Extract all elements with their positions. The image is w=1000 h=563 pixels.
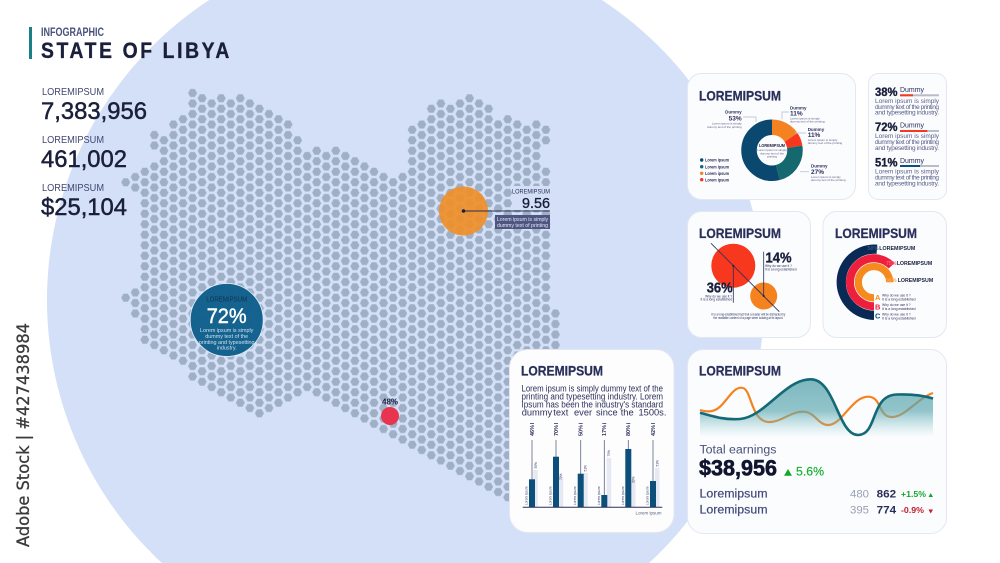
row 38%: 38% bbox=[875, 85, 898, 99]
label: 14%: 14% bbox=[766, 249, 792, 266]
A B C legend: It is a long established bbox=[882, 297, 916, 301]
label: 11% middle bbox=[795, 127, 843, 145]
row 1: +1.5% bbox=[901, 490, 926, 499]
row 51%: dummy text of the printing bbox=[875, 174, 939, 182]
footnote: the readable content of a page when looking at its layout. bbox=[713, 316, 783, 320]
title block: STATE OF LIBYA bbox=[41, 38, 232, 63]
bar chart: Lorem ipsum bbox=[621, 486, 625, 505]
legend: Lorem ipsum bbox=[705, 177, 729, 183]
vertical stock credit: Adobe Stock | #427438984 bbox=[14, 323, 34, 547]
label: 27% bbox=[800, 163, 846, 182]
footnote: It is a long established fact that a reader will be distracted by bbox=[711, 313, 786, 317]
row 1: 480 bbox=[850, 488, 869, 500]
row 38%: Dummy bbox=[900, 85, 924, 94]
donut centre text: Lorem ipsum is simply bbox=[757, 148, 787, 152]
row 38%: dummy text of the printing bbox=[875, 104, 939, 111]
paragraph: ever bbox=[574, 408, 592, 418]
paragraph: text bbox=[553, 408, 569, 418]
label: 53%: Dummy bbox=[725, 110, 742, 115]
A B C legend: Why do we use it ? bbox=[882, 303, 911, 307]
A B C legend: Why do we use it ? bbox=[882, 312, 911, 316]
label: 11% top: Dummy bbox=[790, 105, 807, 110]
paragraph bbox=[522, 383, 666, 418]
marker: blue 72%: LOREMIPSUM bbox=[206, 296, 247, 304]
bar chart bbox=[523, 424, 662, 507]
title block: INFOGRAPHIC bbox=[41, 27, 104, 39]
marker: orange 9.56: dummy text of printing bbox=[497, 223, 548, 229]
row 72%: Dummy bbox=[900, 120, 924, 130]
key statistics: 461,002 bbox=[41, 146, 127, 173]
marker: orange 9.56: Lorem ipsum is simply bbox=[497, 217, 549, 223]
bar chart: 17% bbox=[602, 424, 608, 436]
panel: donut chart bbox=[688, 74, 856, 200]
legend: Lorem ipsum bbox=[705, 158, 729, 164]
panel: circles comparison bbox=[688, 212, 810, 338]
donut centre text: printing bbox=[767, 155, 777, 159]
label: 36%: 36% bbox=[707, 280, 733, 297]
label: 11% top: dummy text of the printing bbox=[790, 119, 825, 123]
label: 36% bbox=[700, 280, 733, 302]
bar chart: 70% bbox=[554, 424, 560, 436]
total earnings: 5.6% bbox=[796, 466, 824, 478]
row 2: -0.9% bbox=[901, 506, 924, 515]
panel: bar chart with text bbox=[510, 350, 674, 532]
paragraph: since bbox=[596, 408, 618, 418]
legend bbox=[700, 158, 729, 183]
arc labels: LOREMIPSUM bbox=[897, 261, 933, 267]
arc labels: LOREMIPSUM bbox=[898, 278, 934, 284]
row 38% bbox=[875, 85, 940, 117]
bar chart: 46% bbox=[530, 424, 536, 436]
key statistics: LOREMIPSUM bbox=[42, 135, 104, 146]
row 51%: 51% bbox=[875, 156, 898, 170]
line chart bbox=[700, 379, 933, 437]
row 38%: and typesetting industry. bbox=[875, 110, 939, 117]
marker: blue 72%: Lorem ipsum is simply bbox=[200, 328, 254, 334]
label: 27%: dummy text of the printing bbox=[811, 178, 846, 182]
background circle bbox=[47, 0, 764, 563]
marker: blue 72%: dummy text of the bbox=[205, 334, 248, 340]
bar chart: 70% bbox=[559, 473, 563, 480]
panel: circles comparison: LOREMIPSUM bbox=[699, 226, 781, 241]
row 51% bbox=[875, 156, 940, 188]
bar chart: Lorem ipsum bbox=[597, 486, 601, 505]
paragraph: 1500s. bbox=[638, 408, 666, 418]
label: 11% top: 11% bbox=[790, 110, 803, 118]
red and orange circles bbox=[711, 243, 779, 312]
marker: orange 9.56: 9.56 bbox=[522, 196, 550, 212]
label: 11% middle: Dummy bbox=[808, 127, 825, 132]
label: 11% middle: dummy text of the printing bbox=[808, 141, 843, 145]
bar chart: 51% bbox=[584, 465, 588, 472]
panel: radial bars bbox=[823, 212, 946, 338]
paragraph: the bbox=[621, 408, 634, 418]
panel: earnings bbox=[688, 350, 946, 534]
hexagon map of Libya bbox=[121, 88, 560, 502]
key statistics: 7,383,956 bbox=[41, 98, 147, 125]
row 51%: and typesetting industry. bbox=[875, 180, 939, 188]
A B C legend: C bbox=[875, 312, 881, 321]
arc labels: 75% bbox=[886, 261, 897, 267]
label: 14%: It is a long established bbox=[765, 268, 797, 272]
A B C legend: Why do we use it ? bbox=[882, 294, 911, 298]
bar chart: Lorem ipsum bbox=[524, 486, 528, 505]
paragraph: dummy bbox=[522, 408, 553, 418]
bar chart: 80% bbox=[626, 424, 632, 436]
marker: blue 72%: 72% bbox=[207, 305, 247, 328]
row 51%: Dummy bbox=[900, 156, 924, 165]
bar chart: Lorem ipsum bbox=[548, 486, 552, 505]
paragraph: Ipsum has been the industry's standard bbox=[522, 400, 663, 410]
bar chart: 50% bbox=[578, 424, 584, 436]
donut centre text: dummy text of the bbox=[760, 151, 784, 155]
row 51%: Lorem ipsum is simply bbox=[875, 169, 940, 176]
A B C legend bbox=[875, 293, 916, 321]
row 1: Loremipsum bbox=[700, 488, 768, 500]
panel: bar chart with text: LOREMIPSUM bbox=[521, 364, 603, 379]
label: 53%: 53% bbox=[729, 115, 742, 122]
legend: Lorem ipsum bbox=[705, 171, 729, 177]
A B C legend: It is a long established bbox=[882, 307, 916, 311]
row 38%: Lorem ipsum is simply bbox=[875, 98, 940, 105]
row 2 bbox=[700, 504, 933, 516]
label: 27%: Dummy bbox=[811, 163, 828, 168]
bar chart: 75% bbox=[607, 450, 611, 456]
key statistics: $25,104 bbox=[41, 194, 127, 221]
arc labels bbox=[868, 246, 934, 284]
paragraph: Lorem ipsum is simply dummy text of the bbox=[522, 383, 663, 393]
arc labels: 50% bbox=[868, 246, 879, 252]
paragraph: printing and typesetting industry. Lorem bbox=[522, 392, 663, 402]
row 72% bbox=[875, 120, 940, 152]
row 1: 862 bbox=[877, 488, 896, 500]
row 72%: 72% bbox=[875, 120, 898, 134]
marker: orange 9.56 bbox=[439, 186, 553, 236]
legend: Lorem ipsum bbox=[705, 164, 729, 170]
total earnings: Total earnings bbox=[700, 444, 777, 456]
bar chart: 35% bbox=[534, 462, 538, 468]
row 2: 395 bbox=[850, 504, 869, 516]
title block bbox=[29, 27, 232, 63]
axis caption: Lorem ipsum bbox=[635, 510, 662, 515]
A B C legend: A bbox=[875, 293, 881, 302]
donut centre text bbox=[757, 143, 787, 159]
key statistics bbox=[41, 87, 147, 221]
label: 53%: dummy text of the printing bbox=[707, 125, 742, 129]
row 72%: dummy text of the printing bbox=[875, 139, 939, 146]
row 2: Loremipsum bbox=[700, 504, 768, 516]
label: 36%: It is a long established bbox=[700, 298, 732, 302]
footnote bbox=[711, 313, 786, 320]
total earnings bbox=[699, 444, 824, 481]
label: 27%: 27% bbox=[811, 169, 824, 176]
row 1 bbox=[700, 488, 933, 500]
panel: donut chart: LOREMIPSUM bbox=[699, 89, 781, 104]
panel: percentage bars bbox=[868, 74, 946, 200]
row 72%: and typesetting industry. bbox=[875, 145, 939, 152]
row 72%: Lorem ipsum is simply bbox=[875, 133, 940, 140]
A B C legend: B bbox=[875, 302, 881, 311]
label: 11% middle: 11% bbox=[808, 132, 821, 139]
panel: radial bars: LOREMIPSUM bbox=[835, 226, 917, 241]
marker: red 48%: 48% bbox=[382, 396, 398, 406]
bar chart: Lorem ipsum bbox=[573, 486, 577, 505]
label: 14%: Why do we use it ? bbox=[765, 264, 792, 268]
label: 53%: Lorem ipsum is simply bbox=[712, 122, 742, 126]
key statistics: LOREMIPSUM bbox=[42, 183, 104, 194]
bar chart: 42% bbox=[651, 424, 657, 436]
A B C legend: It is a long established bbox=[882, 316, 916, 320]
donut chart bbox=[749, 127, 795, 173]
arc labels: 90% bbox=[886, 278, 897, 284]
label: 53% bbox=[707, 110, 756, 129]
marker: red 48% bbox=[381, 396, 399, 425]
row 2: 774 bbox=[877, 504, 897, 516]
arc labels: LOREMIPSUM bbox=[879, 246, 916, 252]
label: 11% top bbox=[782, 105, 825, 123]
label: 27%: Lorem ipsum is simply bbox=[811, 175, 841, 179]
bar chart: 30% bbox=[631, 476, 635, 483]
key statistics: LOREMIPSUM bbox=[42, 87, 104, 98]
panel: earnings: LOREMIPSUM bbox=[699, 364, 781, 379]
label: 11% top: Lorem ipsum is simply bbox=[790, 116, 820, 120]
bar chart: Lorem ipsum bbox=[646, 486, 650, 505]
radial arcs bbox=[841, 249, 892, 315]
total earnings: $38,956 bbox=[699, 456, 777, 481]
label: 11% middle: Lorem ipsum is simply bbox=[808, 138, 838, 142]
label: 36%: Why do we use it ? bbox=[705, 294, 732, 298]
marker: blue 72%: industry. bbox=[217, 346, 237, 352]
bar chart: 51% bbox=[656, 460, 660, 466]
donut centre text: LOREMIPSUM bbox=[759, 143, 785, 148]
marker: orange 9.56: LOREMIPSUM bbox=[512, 188, 550, 196]
marker: blue 72%: printing and typesetting bbox=[199, 340, 255, 346]
marker: blue 72% bbox=[190, 284, 263, 356]
